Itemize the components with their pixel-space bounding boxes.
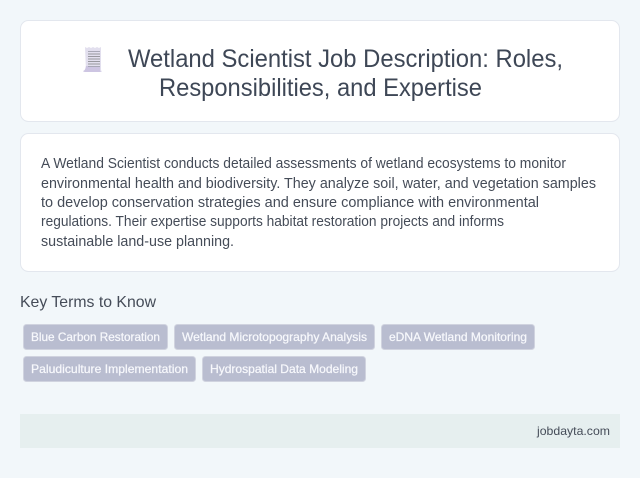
tag: Wetland Microtopography Analysis: Wetland Microtopography Analysis xyxy=(182,330,367,344)
panel: description xyxy=(20,134,620,272)
description text: environmental health and biodiversity. They analyze soil, water, and vegetation samples xyxy=(41,176,596,192)
title: Responsibilities, and Expertise xyxy=(159,74,482,102)
tag: Hydrospatial Data Modeling: Hydrospatial Data Modeling xyxy=(210,362,358,376)
tag: Blue Carbon Restoration: Blue Carbon Restoration xyxy=(31,330,160,344)
key term tags xyxy=(24,324,534,382)
tag: eDNA Wetland Monitoring: eDNA Wetland Monitoring xyxy=(389,330,527,344)
icon: document scroll xyxy=(83,47,102,72)
title xyxy=(128,45,563,102)
header panel xyxy=(20,20,620,122)
tag: Wetland Microtopography Analysis xyxy=(174,324,374,350)
tag: Paludiculture Implementation: Paludiculture Implementation xyxy=(31,362,188,376)
tag: Paludiculture Implementation xyxy=(24,356,196,382)
description text: sustainable land-use planning. xyxy=(41,234,234,250)
tag: Hydrospatial Data Modeling xyxy=(202,356,366,382)
description text: A Wetland Scientist conducts detailed assessments of wetland ecosystems to monitor xyxy=(41,156,566,172)
tag: Blue Carbon Restoration xyxy=(24,324,168,350)
footer brand: jobdayta.com xyxy=(536,424,610,438)
tag: eDNA Wetland Monitoring xyxy=(382,324,534,350)
description text: regulations. Their expertise supports habitat restoration projects and informs xyxy=(41,214,504,230)
title: Wetland Scientist Job Description: Roles, xyxy=(128,45,563,73)
footer xyxy=(20,414,620,448)
description text: to develop conservation strategies and ensure compliance with environmental xyxy=(41,195,539,211)
heading: key terms: Key Terms to Know xyxy=(20,294,156,311)
description text xyxy=(41,156,596,250)
